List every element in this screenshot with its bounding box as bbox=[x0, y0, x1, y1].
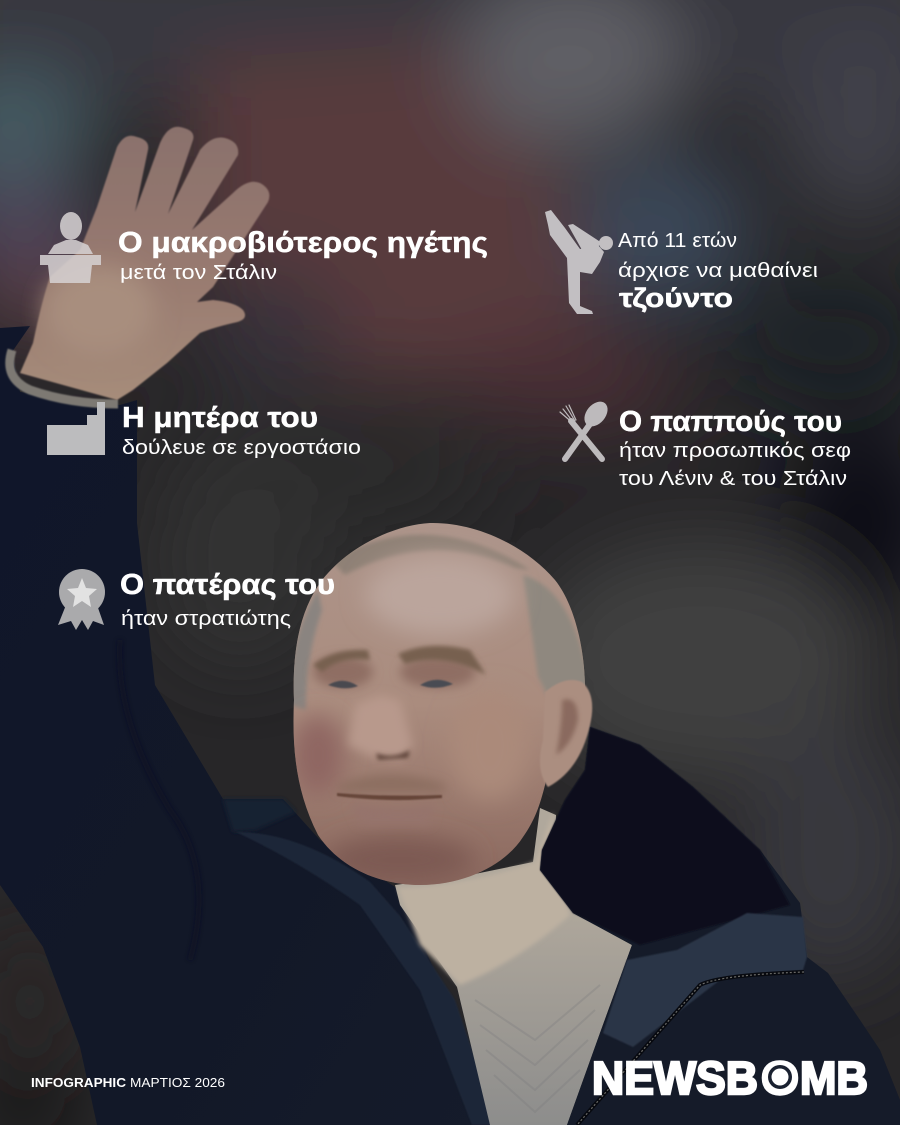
footer credit: INFOGRAPHIC bbox=[31, 1076, 126, 1090]
icon: fork and spoon bbox=[560, 397, 612, 459]
text: was a soldier: ήταν στρατιώτης bbox=[121, 608, 291, 630]
item: longest-serving leader bbox=[40, 212, 488, 284]
logo: Newsbomb: NEWSB bbox=[592, 1052, 758, 1104]
heading: judo: τζούντο bbox=[619, 283, 733, 313]
footer credit bbox=[31, 1076, 225, 1090]
photo: ear bbox=[540, 680, 592, 787]
text: after Stalin: μετά τον Στάλιν bbox=[120, 262, 277, 284]
item: grandfather bbox=[560, 397, 851, 490]
item: judo bbox=[545, 210, 818, 314]
icon: factory steps bbox=[47, 402, 105, 455]
photo: hood and right shoulder bbox=[540, 727, 900, 1125]
text: began learning: άρχισε να μαθαίνει bbox=[618, 260, 818, 282]
icon: speaker at podium bbox=[40, 212, 101, 283]
item: mother bbox=[47, 402, 361, 459]
logo: Newsbomb bbox=[592, 1052, 868, 1104]
heading: longest-serving leader: Ο μακροβιότερος ηγέτης bbox=[118, 227, 488, 259]
heading: mother: Η μητέρα του bbox=[122, 402, 318, 434]
heading: father: Ο πατέρας του bbox=[120, 569, 335, 601]
icon: martial artist bbox=[545, 210, 613, 314]
photo: sleeve cuff bbox=[10, 350, 118, 404]
photo: sweater and turtleneck bbox=[395, 808, 632, 1125]
logo: Newsbomb: O bbox=[761, 1052, 799, 1104]
text: from age 11: Από 11 ετών bbox=[618, 230, 737, 252]
icon: medal bbox=[58, 569, 105, 630]
photo: raised hand bbox=[20, 127, 269, 400]
photo: jacket, raised arm and torso bbox=[0, 326, 500, 1125]
text: worked in a factory: δούλευε σε εργοστάσιο bbox=[122, 437, 361, 459]
text: was personal chef: ήταν προσωπικός σεφ bbox=[619, 440, 851, 462]
logo: Newsbomb: MB bbox=[800, 1052, 868, 1104]
footer credit: ΜΑΡΤΙΟΣ 2026 bbox=[130, 1076, 225, 1090]
item: father bbox=[58, 569, 335, 630]
text: of Lenin and Stalin: του Λένιν & του Στάλιν bbox=[619, 468, 847, 490]
heading: grandfather: Ο παππούς του bbox=[619, 406, 842, 438]
photo: head and face bbox=[290, 523, 592, 885]
